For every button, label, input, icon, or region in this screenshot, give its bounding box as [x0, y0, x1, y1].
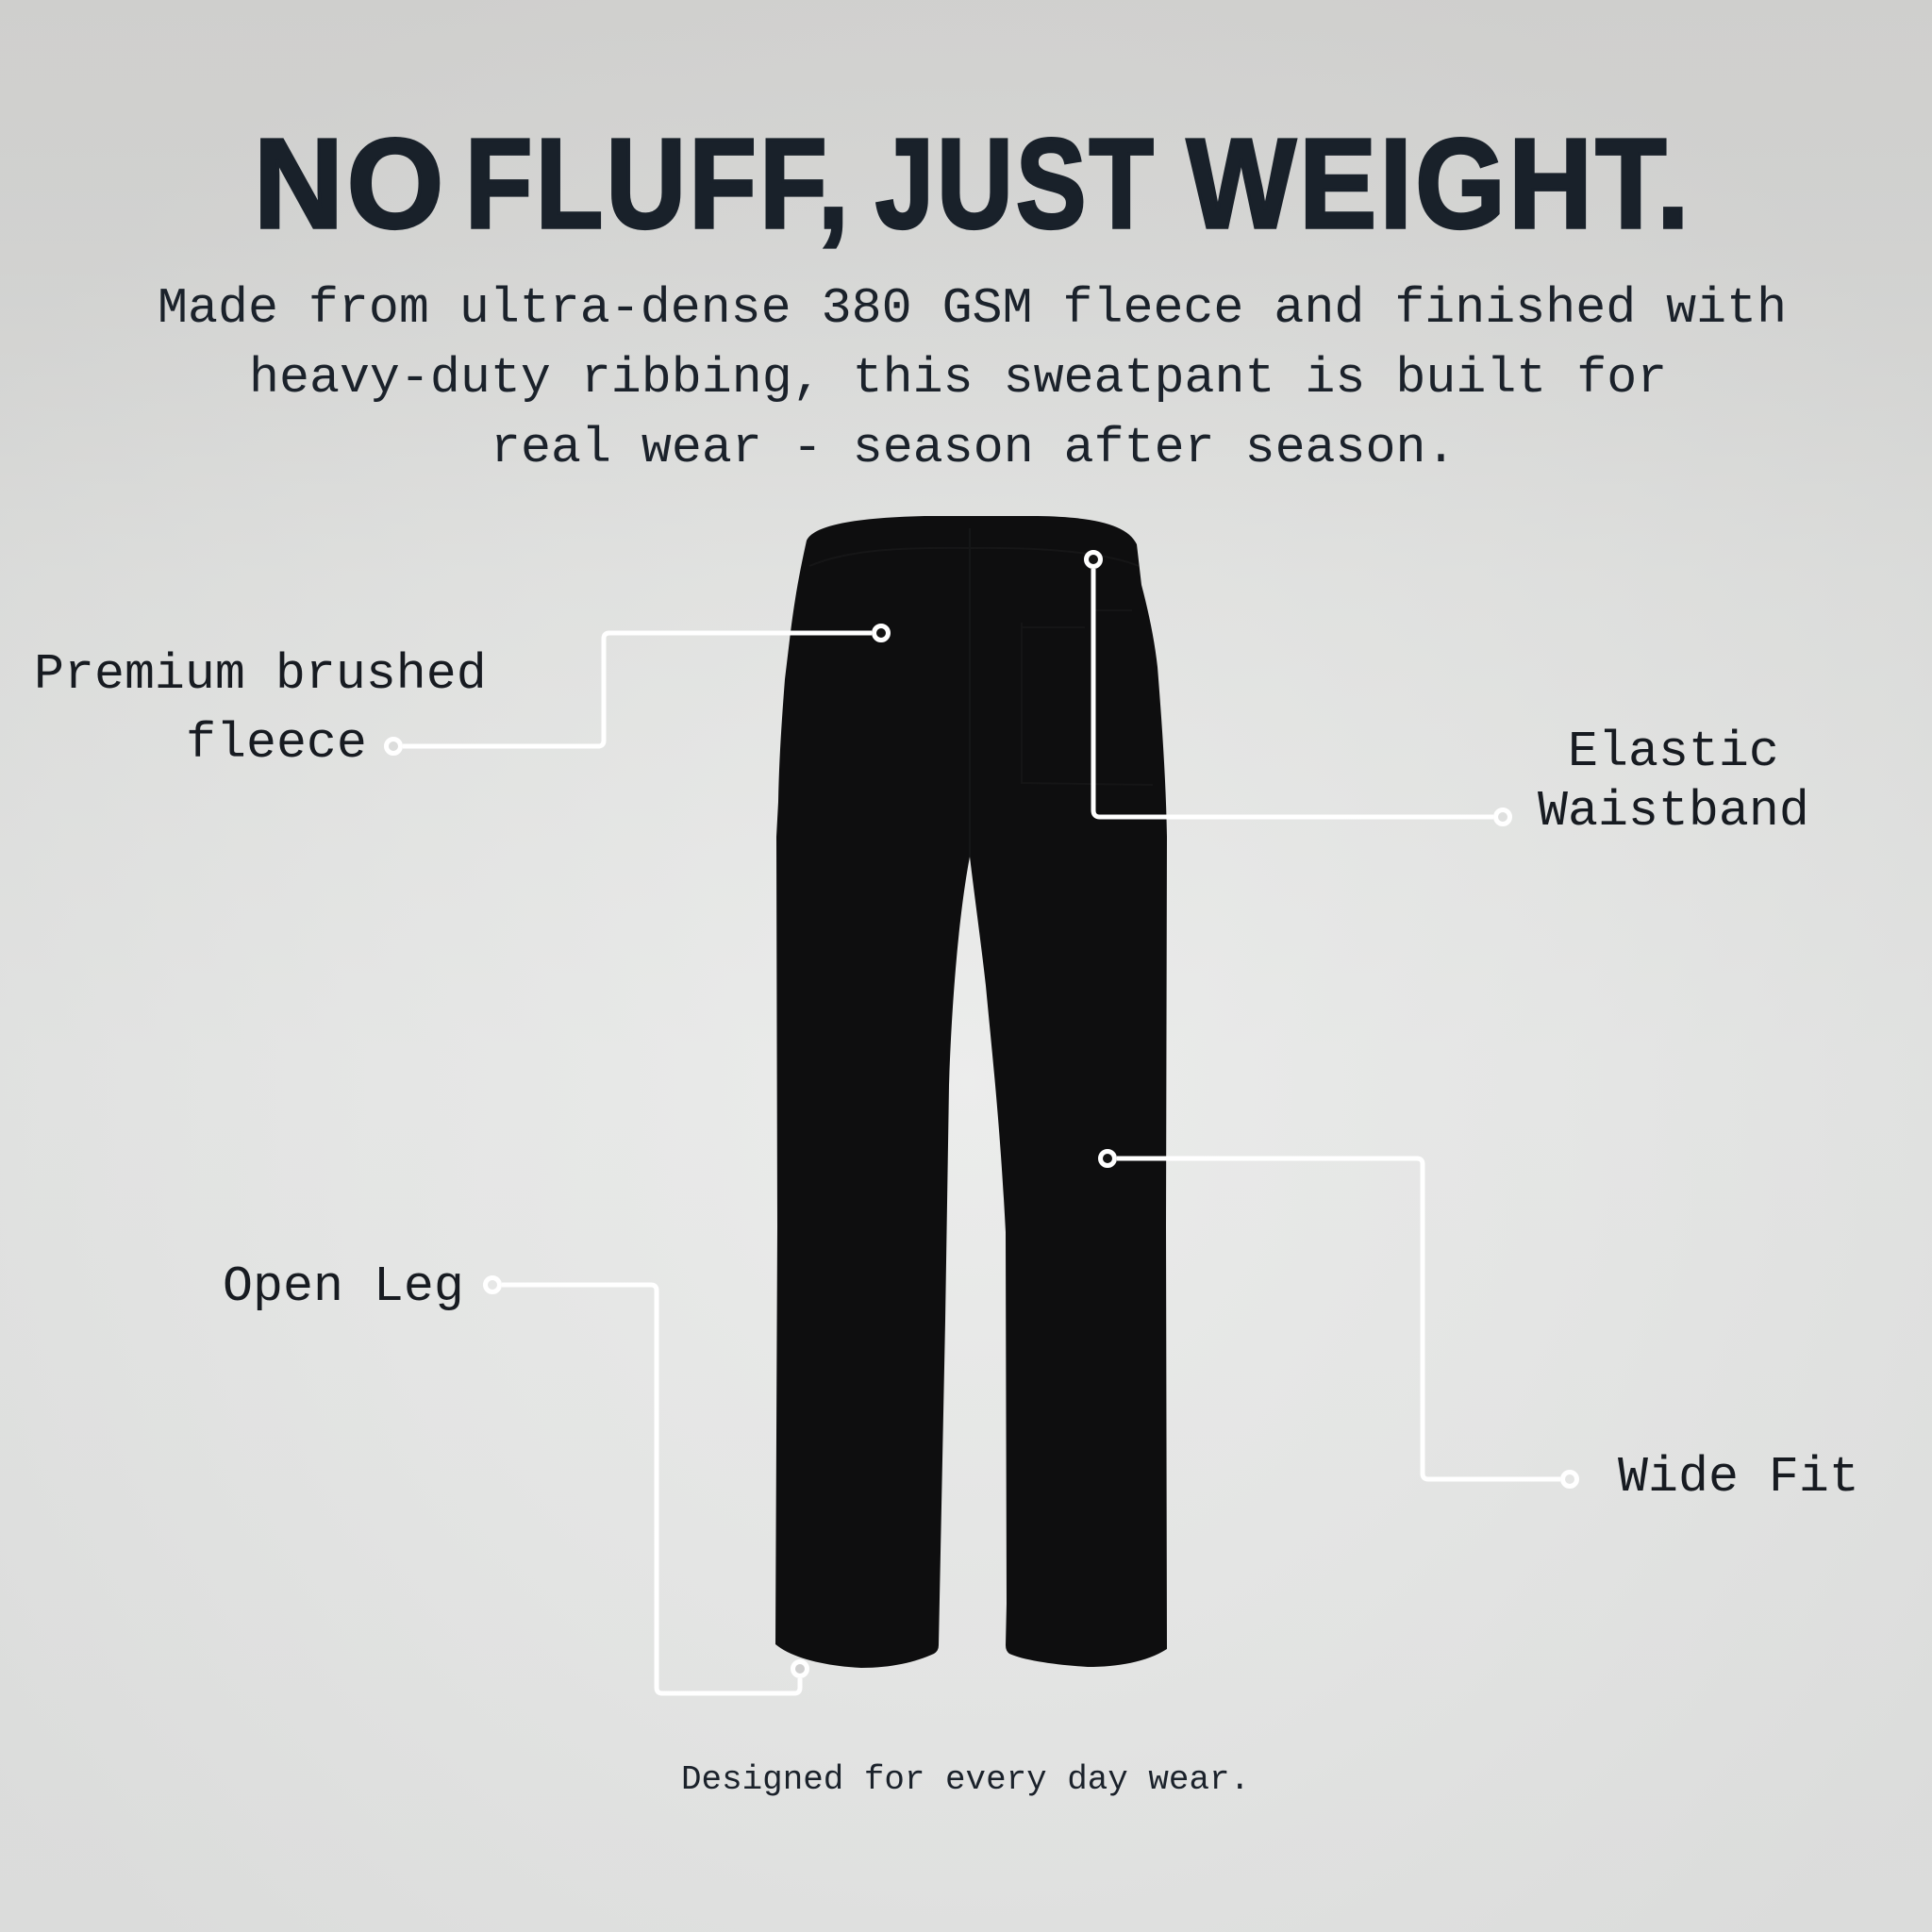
callout: elastic waistband: Elastic	[1568, 724, 1779, 781]
title: JUST	[875, 112, 1157, 255]
callout: premium brushed fleece	[34, 626, 889, 773]
callout: open leg: Open Leg	[223, 1259, 464, 1316]
callout: wide fit	[1100, 1151, 1859, 1507]
title: NO	[254, 112, 447, 255]
intro text block: heavy-duty ribbing, this sweatpant is built for	[249, 351, 1667, 408]
callout: open leg	[223, 1259, 808, 1693]
callout: premium brushed fleece: fleece	[186, 716, 367, 773]
callout: elastic waistband: Waistband	[1538, 784, 1809, 841]
sweatpants image	[775, 516, 1167, 1668]
intro text block	[158, 281, 1787, 477]
footer tagline: Designed for every day wear.	[681, 1760, 1250, 1799]
title: WEIGHT.	[1187, 112, 1692, 255]
title	[254, 112, 1692, 255]
intro text block: real wear - season after season.	[491, 421, 1456, 477]
intro text block: Made from ultra-dense 380 GSM fleece and finished with	[158, 281, 1787, 338]
callout: elastic waistband	[1087, 553, 1809, 841]
callout: premium brushed fleece: Premium brushed	[34, 647, 487, 704]
callout: wide fit: Wide Fit	[1618, 1450, 1859, 1507]
title: FLUFF,	[465, 112, 852, 255]
